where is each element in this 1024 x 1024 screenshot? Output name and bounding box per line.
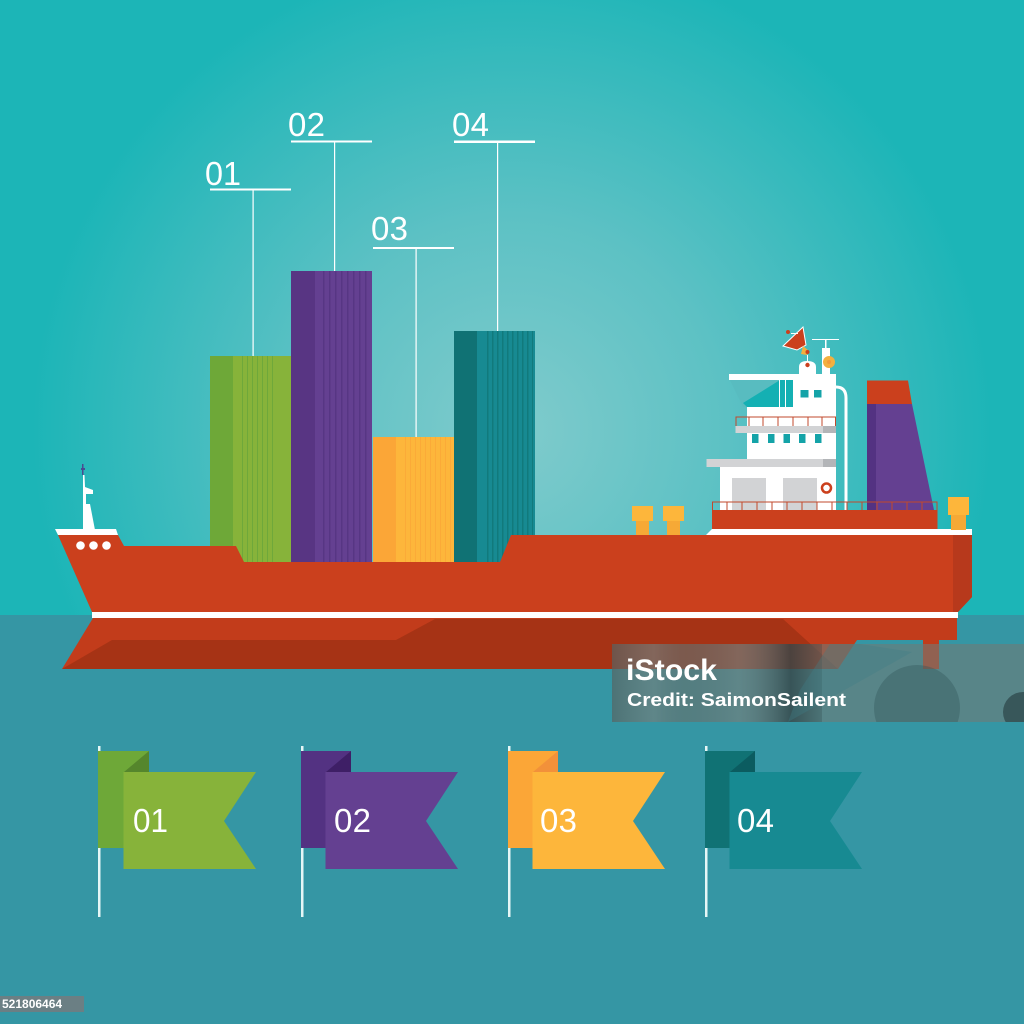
leader 02: 02 bbox=[288, 106, 325, 143]
container stack 02 bbox=[291, 271, 372, 562]
leader 01: 01 bbox=[205, 155, 241, 192]
stern shade bbox=[953, 535, 972, 612]
flag 01: 01 bbox=[133, 802, 168, 839]
waterline stripe bbox=[92, 612, 958, 618]
lower hull shadow bbox=[62, 619, 838, 669]
flag 03 bbox=[508, 746, 665, 917]
image id tag: 521806464 bbox=[2, 997, 62, 1011]
upper shelf bbox=[736, 426, 836, 433]
funnel bbox=[867, 380, 934, 510]
flag 04: 04 bbox=[737, 802, 774, 839]
bow deck bbox=[55, 529, 118, 535]
leader 03: 03 bbox=[371, 210, 408, 247]
upper windows bbox=[800, 390, 822, 398]
watermark panel bbox=[612, 644, 1024, 722]
vents bbox=[632, 497, 969, 535]
deck house base bbox=[712, 510, 938, 529]
satellite dish bbox=[783, 327, 810, 362]
life ring bbox=[822, 484, 831, 492]
sky background bbox=[0, 0, 1024, 615]
pipe bbox=[836, 387, 846, 510]
superstructure bbox=[706, 327, 839, 510]
flag 01 bbox=[98, 746, 256, 917]
image id tag bbox=[0, 996, 84, 1012]
upper hull bbox=[58, 535, 972, 612]
flag 02: 02 bbox=[334, 802, 371, 839]
watermark credit: Credit: SaimonSailent bbox=[627, 689, 846, 710]
deck railing bbox=[712, 502, 937, 510]
leader 04: 04 bbox=[452, 106, 489, 143]
ship bbox=[55, 327, 972, 669]
lower shelf bbox=[706, 459, 836, 467]
dome bbox=[799, 361, 816, 374]
roof bbox=[729, 374, 793, 380]
watermark logo: iStock bbox=[626, 654, 717, 687]
grey doors bbox=[732, 478, 817, 510]
flag 04 bbox=[705, 746, 862, 917]
flag 02 bbox=[301, 746, 458, 917]
mid windows bbox=[752, 434, 822, 443]
antenna mast bbox=[812, 339, 839, 376]
sea bbox=[0, 615, 1024, 1024]
deck strip bbox=[706, 529, 972, 535]
bow mast bbox=[81, 464, 95, 530]
portholes bbox=[76, 541, 111, 550]
container stack 03 bbox=[373, 437, 454, 562]
lower hull bbox=[62, 618, 957, 669]
bridge window bbox=[730, 380, 793, 407]
flag 03: 03 bbox=[540, 802, 577, 839]
container stack 01 bbox=[210, 356, 291, 562]
upper railing bbox=[736, 417, 836, 427]
container stack 04 bbox=[454, 331, 535, 562]
